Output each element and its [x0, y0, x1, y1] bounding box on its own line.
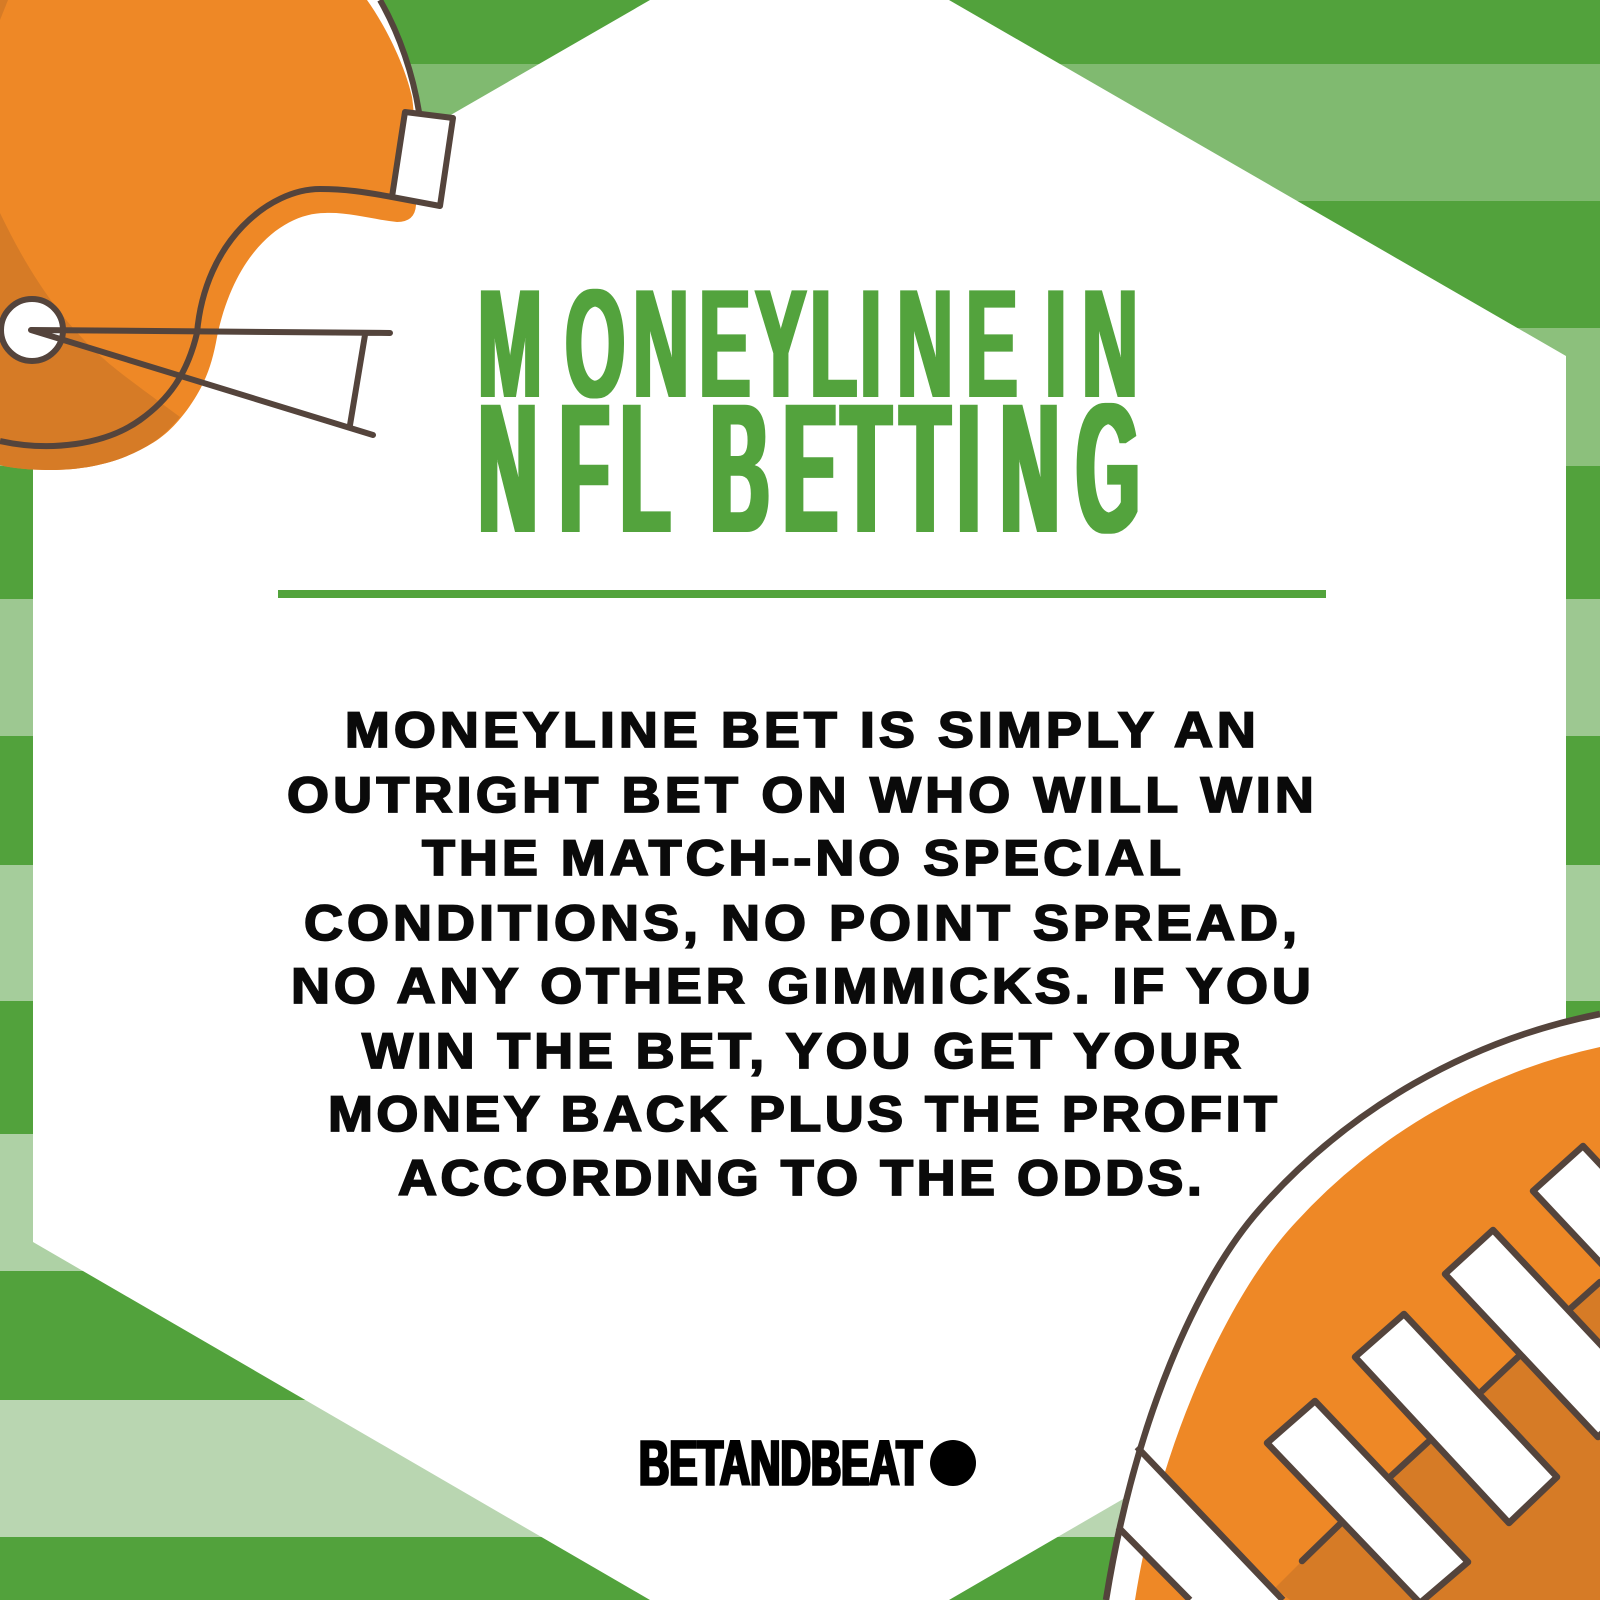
body text: ACCORDING TO THE ODDS.	[398, 1151, 1202, 1207]
title divider rule	[278, 590, 1326, 598]
title line 1: MONEYLINE IN	[478, 257, 1138, 430]
logo dot	[930, 1440, 976, 1486]
logo: BETANDBEAT	[639, 1427, 976, 1499]
body text: MONEYLINE BET IS SIMPLY AN	[345, 703, 1256, 759]
body text: MONEY BACK PLUS THE PROFIT	[328, 1087, 1277, 1143]
body text: CONDITIONS, NO POINT SPREAD,	[304, 896, 1297, 952]
body text: THE MATCH--NO SPECIAL	[422, 831, 1181, 887]
title line 2: NFL BETTING	[478, 366, 1140, 572]
body text: OUTRIGHT BET ON WHO WILL WIN	[287, 768, 1314, 824]
body text: NO ANY OTHER GIMMICKS. IF YOU	[291, 959, 1311, 1015]
icon: football helmet	[0, 0, 453, 470]
icon: football	[1106, 1014, 1600, 1600]
logo wordmark: BETANDBEAT	[639, 1427, 922, 1499]
title	[478, 257, 1140, 572]
body text: WIN THE BET, YOU GET YOUR	[362, 1024, 1241, 1080]
body text	[287, 703, 1314, 1207]
